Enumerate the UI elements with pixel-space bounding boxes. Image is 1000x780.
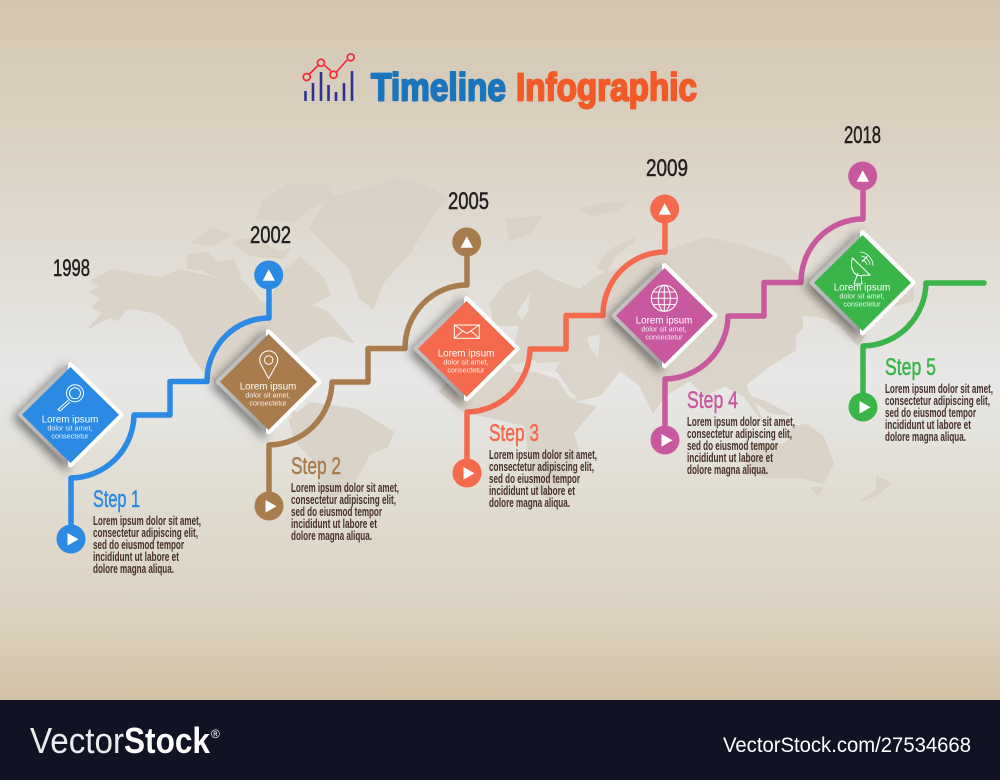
footer logo: Stock [124,720,211,761]
diamond card [210,329,319,441]
card text: dolor sit amet, [245,391,291,400]
icon: location pin [260,351,278,378]
end marker [650,194,679,224]
icon: envelope [454,325,479,338]
card text: Lorem ipsum [438,348,494,359]
icon: magnifier [58,385,84,411]
step description: Lorem ipsum dolor sit amet, [93,514,201,528]
footer logo: ® [211,727,220,741]
step description: consectetur adipiscing elit, [687,427,792,441]
step description: sed do eiusmod tempor [93,538,184,552]
card text [834,282,890,309]
step 3 [408,188,679,510]
title word: Timeline: Timeline [371,66,506,110]
step description: consectetur adipiscing elit, [489,460,594,474]
card text: Lorem ipsum [42,414,98,425]
connector line [269,243,467,506]
year 2009: 2009 [646,155,688,182]
icon: globe [651,285,677,311]
footer logo: Vector [30,720,124,761]
step description: incididunt ut labore et [291,517,378,531]
step description: dolore magna aliqua. [687,463,768,477]
card text [636,315,692,342]
step heading: Step 2 [291,453,341,480]
card text [438,348,494,375]
map: Tasmania and New Zealand [812,477,890,500]
step description [291,481,399,543]
connector line [665,177,863,440]
connector line [863,283,984,407]
end marker [452,228,481,256]
card text: Lorem ipsum [240,381,296,392]
map: Australia [745,425,833,483]
step description: incididunt ut labore et [687,451,774,465]
step description: sed do eiusmod tempor [687,439,778,453]
card text: dolor sit amet, [443,358,489,367]
year 2018: 2018 [844,122,881,149]
card text: dolor sit amet, [47,424,93,433]
step description: incididunt ut labore et [93,550,180,564]
step description: Lorem ipsum dolor sit amet, [687,415,795,429]
step 1 [12,255,283,576]
map: North America [90,258,353,418]
step description: consectetur adipiscing elit, [93,526,198,540]
card text: dolor sit amet, [641,325,687,334]
map: Indonesia [745,395,823,437]
step description: consectetur adipiscing elit, [291,493,396,507]
card text: consectetur [249,399,287,408]
map: Arctic islands [188,185,333,277]
step description: incididunt ut labore et [489,484,576,498]
start marker [848,392,878,422]
step 2 [210,222,481,543]
card text: consectetur [447,366,485,375]
step description: dolore magna aliqua. [291,529,372,543]
step description: Lorem ipsum dolor sit amet, [489,448,597,462]
step description: sed do eiusmod tempor [489,472,580,486]
start marker [56,524,86,554]
step heading: Step 3 [489,420,539,447]
card text: consectetur [843,300,881,309]
diamond card [12,362,121,474]
start marker [254,492,284,520]
footer bar [0,700,1000,780]
diamond card [408,296,517,408]
step heading: Step 4 [687,387,738,414]
footer logo [30,720,220,761]
icon: satellite dish [851,252,873,284]
step 4 [606,155,877,477]
end marker [254,260,283,290]
year 2002: 2002 [250,222,291,249]
map: Africa [440,365,595,497]
step description: dolore magna aliqua. [489,496,570,510]
map: inland seas [510,293,830,398]
step description: sed do eiusmod tempor [291,505,382,519]
card text: consectetur [645,333,683,342]
world map [90,178,913,500]
step heading: Step 5 [885,354,936,381]
logo: bars [306,71,352,101]
diamond card [606,263,715,375]
step heading: Step 1 [93,486,140,513]
start marker [452,458,482,488]
connector line [71,276,269,539]
step description [93,514,201,576]
start marker [650,426,680,454]
step description: dolore magna aliqua. [93,562,174,576]
card text [240,381,296,408]
title [371,66,697,110]
card text [42,414,98,441]
step 5 [804,122,993,444]
map: Greenland [310,178,447,308]
card text: Lorem ipsum [636,315,692,326]
title logo icon [303,54,354,101]
card text: dolor sit amet, [839,292,885,301]
map: South America [290,403,393,497]
step description [489,448,597,510]
step description [885,382,993,444]
step description: Lorem ipsum dolor sit amet, [291,481,399,495]
year 2005: 2005 [448,188,489,215]
step description [687,415,795,477]
end marker [848,162,877,190]
footer image id: VectorStock.com/27534668 [723,734,971,757]
diamond card [804,230,913,342]
connector line [467,210,665,473]
card text: consectetur [51,432,89,441]
map: Eurasia [490,238,913,420]
year 1998: 1998 [53,255,90,282]
card text: Lorem ipsum [834,282,890,293]
map: Iceland and Svalbard [507,202,635,272]
logo: trend line [303,54,354,80]
title word: Infographic: Infographic [516,66,697,110]
